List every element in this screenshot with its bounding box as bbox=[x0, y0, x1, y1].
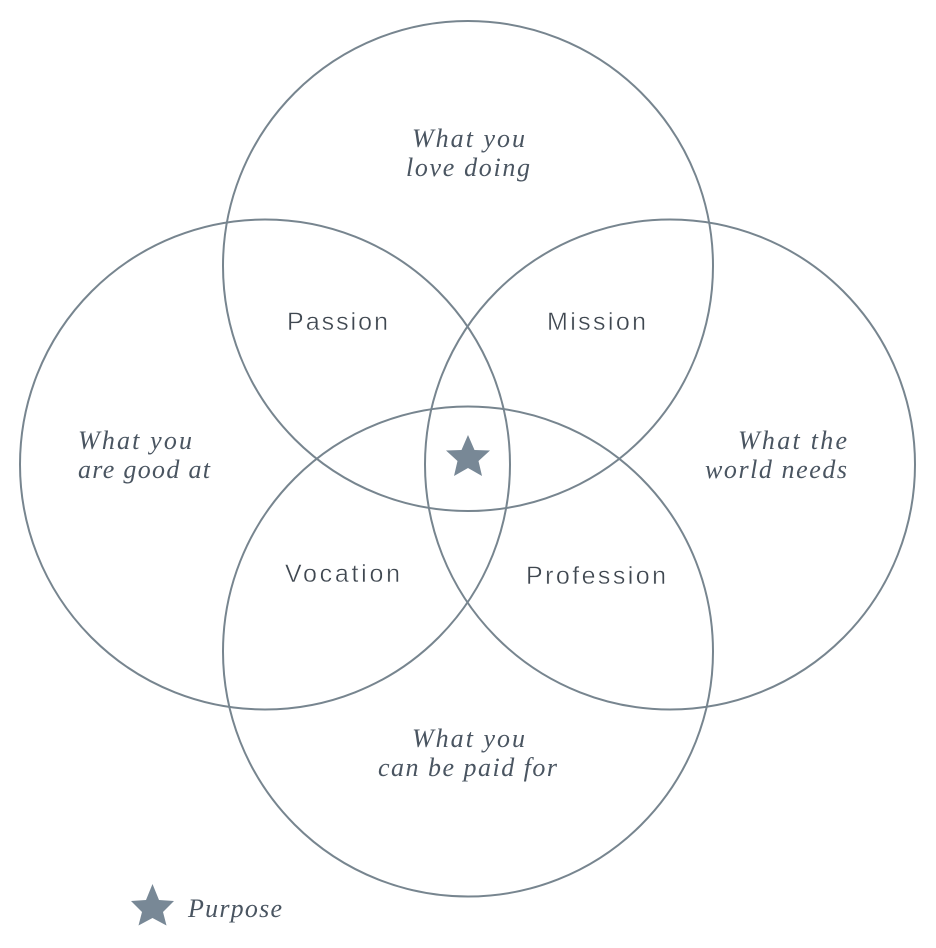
circle: what you can be paid for bbox=[223, 406, 713, 896]
circle: what you love doing bbox=[223, 21, 713, 511]
label: what you love doing bbox=[406, 124, 530, 182]
label: what you are good at: are good at bbox=[78, 455, 211, 484]
label: passion: Passion bbox=[287, 308, 388, 336]
label: what you are good at: What you bbox=[78, 426, 192, 455]
label: profession: Profession bbox=[526, 562, 666, 590]
label: mission: Mission bbox=[547, 308, 646, 336]
label: what the world needs: What the bbox=[738, 426, 847, 455]
circle: what you are good at bbox=[20, 220, 510, 710]
label: what you can be paid for bbox=[378, 724, 558, 782]
label: what you can be paid for: What you bbox=[412, 724, 525, 753]
label: what you can be paid for: can be paid for bbox=[378, 753, 558, 782]
legend label: purpose: Purpose bbox=[187, 894, 282, 923]
label: what you love doing: love doing bbox=[406, 153, 530, 182]
label: what you love doing: What you bbox=[412, 124, 525, 153]
label: what you are good at bbox=[78, 426, 211, 484]
label: what the world needs: world needs bbox=[705, 455, 847, 484]
icon: legend star bbox=[131, 884, 174, 926]
label: what the world needs bbox=[705, 426, 847, 484]
icon: center star bbox=[446, 435, 490, 476]
legend bbox=[131, 884, 282, 926]
label: vocation: Vocation bbox=[285, 560, 400, 588]
circle: what the world needs bbox=[425, 220, 915, 710]
